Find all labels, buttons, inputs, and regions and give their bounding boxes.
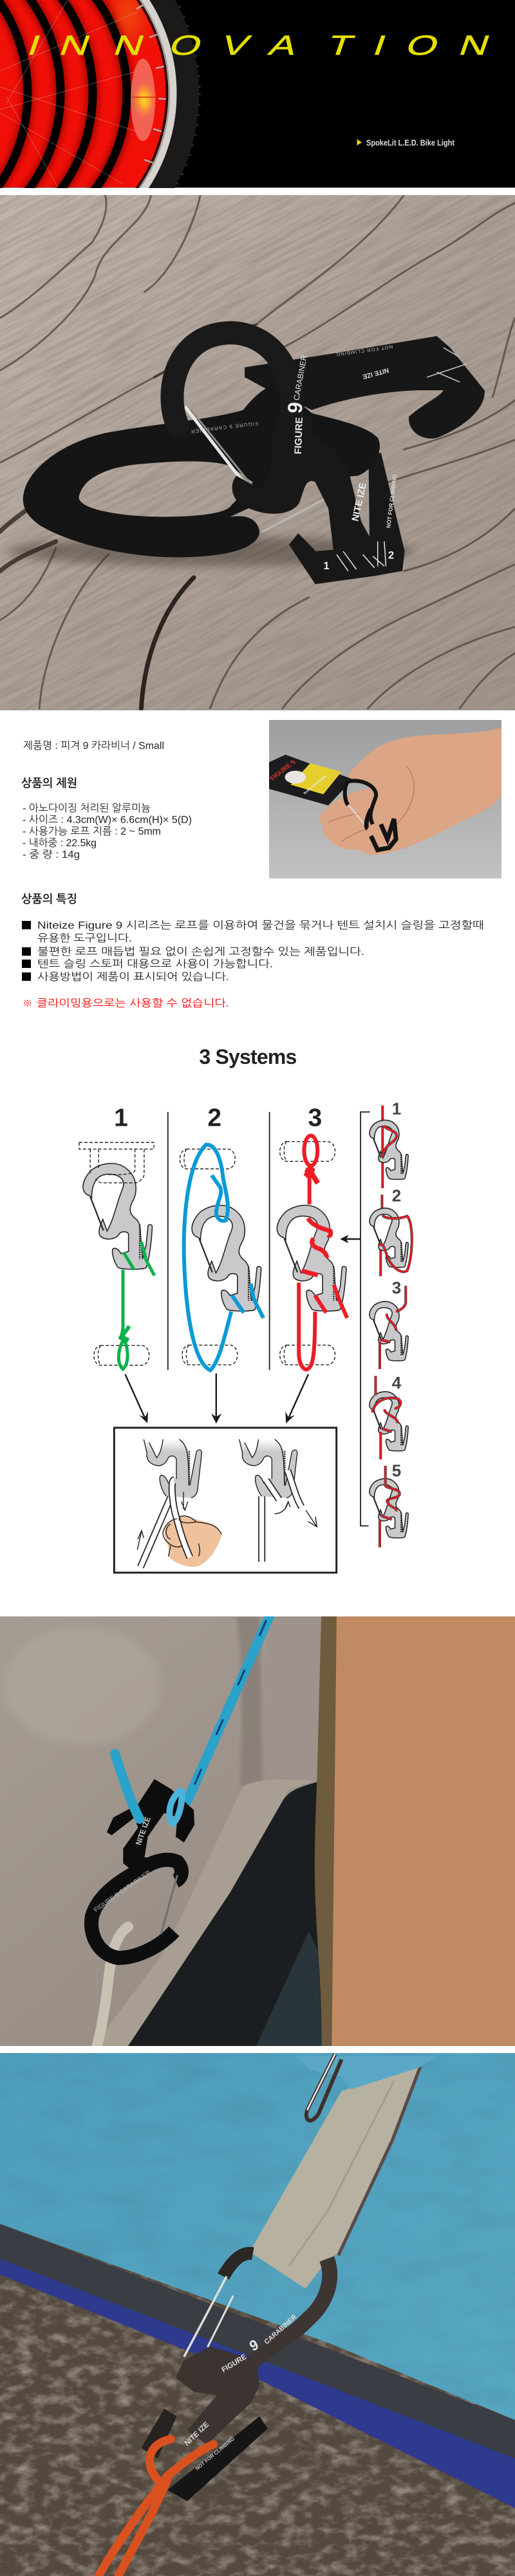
back carabiner: [245, 336, 485, 439]
standing carabiner: 2: [388, 549, 394, 561]
feature list: [22, 920, 484, 983]
left hook with hand: [137, 1439, 221, 1567]
system 2: [180, 1144, 263, 1370]
standing carabiner: NITE IZE: [350, 482, 369, 522]
step 4: [370, 1373, 408, 1459]
text: product name: [21, 740, 192, 860]
column dividers: [168, 1112, 370, 1526]
step 1: [370, 1099, 408, 1188]
numerals: 2: [207, 1104, 221, 1132]
heading: features: [21, 893, 484, 1009]
product package: ROPE TIGHTENER: [303, 775, 328, 795]
photo: carabiner held in hand: [269, 720, 501, 878]
specification list: - 사용가능 로프 지름 : 2 ~ 5mm: [23, 826, 161, 837]
standing carabiner: 1: [324, 560, 330, 572]
dark carabiner: CARABINER: [263, 2313, 298, 2346]
dark plastic panel: [128, 1782, 322, 2046]
feature list: Niteize Figure 9 시리즈는 로프를 이용하여 물건을 묶거나 텐트 설치시 슬링을 고정할때: [37, 920, 484, 931]
white cord: [97, 1927, 128, 2046]
led light glow: [131, 59, 157, 141]
standing carabiner: FIGURE: [293, 417, 305, 455]
bike wheel with red light rings: [0, 0, 201, 188]
specification list: [23, 802, 192, 860]
navy tent floor: [0, 2248, 515, 2508]
dark carabiner: NITE IZE: [183, 2420, 211, 2448]
feature list: 유용한 도구입니다.: [37, 933, 132, 944]
dark carabiner: [141, 2253, 330, 2501]
specification list: - 사이즈 : 4.3cm(W)× 6.6cm(H)× 5(D): [23, 814, 192, 826]
specification list: - 중 량 : 14g: [23, 849, 80, 860]
system 3: [277, 1135, 347, 1370]
photo: tent with carabiner and orange rope: [0, 2053, 515, 2576]
upper wire gate: [306, 2054, 342, 2121]
heading: 3 Systems: 3 Systems: [199, 1045, 297, 1068]
numerals: 1: [114, 1104, 128, 1132]
dark carabiner: 9: [247, 2336, 261, 2354]
product package: FIGURE 9: [269, 759, 298, 781]
step 5: 5: [392, 1461, 401, 1481]
step 2: 2: [392, 1186, 401, 1206]
blue tent wall: [0, 2053, 515, 2438]
specification list: - 아노다이징 처리된 알루미늄: [23, 802, 151, 814]
dark carabiner: NOT FOR CLIMBING: [194, 2436, 236, 2472]
cardboard surface: [332, 1616, 515, 2046]
back carabiner: NOT FOR CLIMBING: [335, 344, 393, 357]
right hook: [239, 1439, 317, 1562]
title: innovation: INNOVATION: [24, 30, 494, 61]
heading: features: 상품의 특징: [21, 893, 77, 905]
feature list: 사용방법이 제품이 표시되어 있습니다.: [37, 971, 229, 983]
specification list: - 내하중 : 22.5kg: [23, 837, 97, 849]
system 1: [79, 1142, 154, 1369]
photo: carabiners on wood: [0, 195, 515, 710]
step 4: 4: [392, 1373, 402, 1392]
step 5: [370, 1461, 408, 1548]
step 1: 1: [392, 1099, 401, 1119]
detail box: [114, 1428, 337, 1573]
brown door edge: [315, 1616, 337, 2046]
numerals: 3: [308, 1104, 322, 1132]
text: product name: 제품명 : 피겨 9 카라비너 / Small: [23, 740, 164, 752]
photo: rope and carabiner in vehicle: [0, 1616, 515, 2046]
dark hem: [0, 2224, 515, 2458]
arrows to detail box: [125, 1235, 360, 1424]
diagram: three rope systems: [79, 1099, 413, 1574]
orange rope: [98, 2439, 214, 2576]
standing carabiner: 9: [283, 401, 307, 414]
wire gates: [185, 408, 325, 531]
hanging black carabiner: NITE IZE: [134, 1816, 153, 1846]
large lying carabiner ring: [23, 384, 380, 557]
large lying carabiner ring: FIGURE 9 CARABINER: [190, 421, 258, 434]
hand: [320, 728, 501, 855]
hanging black carabiner: FIGURE 9 CARABINER: [93, 1870, 153, 1913]
hanging black carabiner: [91, 1754, 194, 1958]
feature list: 불편한 로프 매듭법 필요 없이 손쉽게 고정할수 있는 제품입니다.: [37, 946, 364, 958]
small carabiner: [345, 781, 396, 850]
feature list: 텐트 슬링 스토퍼 대용으로 사용이 가능합니다.: [37, 958, 273, 970]
standing carabiner: CARABINER: [292, 354, 309, 401]
standing carabiner: [172, 333, 405, 584]
numerals: [114, 1104, 322, 1132]
warning: not for climbing: ※ 클라이밍용으로는 사용할 수 없습니다.: [22, 998, 229, 1009]
dark carabiner: FIGURE: [221, 2353, 248, 2374]
banner: innovation bike light: [0, 0, 515, 188]
wood cracks: [0, 195, 515, 708]
product package: [268, 755, 353, 806]
grey webbing strap: [250, 2056, 437, 2289]
blue rope: [187, 1616, 269, 1801]
standing carabiner: NOT FOR CLIMBING: [385, 474, 398, 529]
heading: specifications: 상품의 제원: [21, 777, 77, 790]
step 3: 3: [392, 1278, 401, 1298]
seat ledge: [93, 1779, 315, 2046]
step 2: [370, 1186, 412, 1276]
step 3: [370, 1278, 408, 1369]
back carabiner: NITE IZE: [362, 366, 389, 380]
caption: SpokeLit L.E.D. Bike Light: SpokeLit L.E.D. Bike Light: [366, 138, 455, 147]
shadow under carabiners: [6, 536, 414, 566]
